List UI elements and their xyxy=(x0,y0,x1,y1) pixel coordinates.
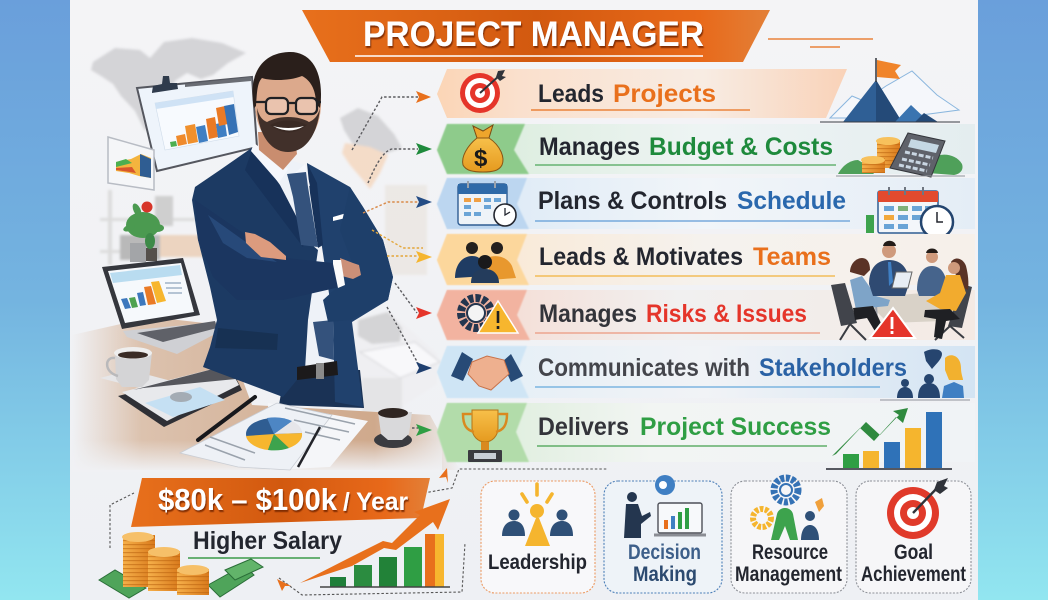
icon: gears and people xyxy=(753,478,824,540)
coffee cup left xyxy=(100,347,175,390)
card: resource management xyxy=(731,478,847,593)
arrow to leads projects xyxy=(352,91,431,150)
right office background xyxy=(350,185,440,412)
label: Delivers xyxy=(538,413,629,441)
world map backdrop xyxy=(91,38,402,189)
icon: coins and cash xyxy=(99,532,263,598)
salary text: $80k – $100k xyxy=(158,482,338,517)
label: Goal xyxy=(894,541,933,564)
row 2: manages budget and costs xyxy=(437,124,975,177)
arrow to risks xyxy=(395,283,432,319)
row 3: plans and controls schedule xyxy=(437,178,975,238)
man right xyxy=(926,251,938,263)
pocket square xyxy=(333,212,350,221)
viewer-left arm with forearm xyxy=(195,200,340,300)
title banner xyxy=(302,10,770,62)
icon: mountain with flag xyxy=(820,58,960,122)
shirt collar xyxy=(251,143,310,186)
arrow to stakeholders xyxy=(387,307,432,374)
jacket left panel xyxy=(192,147,318,397)
connector arrows xyxy=(352,91,432,436)
man center xyxy=(882,244,896,258)
label: Projects xyxy=(613,80,716,108)
viewer-right arm xyxy=(323,187,393,322)
icon: team meeting xyxy=(831,241,972,340)
plant xyxy=(122,202,164,262)
label xyxy=(628,541,701,586)
row 1: leads projects xyxy=(437,58,960,122)
head xyxy=(255,58,321,150)
icon: handshake xyxy=(451,352,523,390)
label: Risks & Issues xyxy=(646,300,807,328)
row 4: leads and motivates teams xyxy=(437,234,975,285)
card: leadership xyxy=(481,481,595,593)
icon: stakeholders xyxy=(897,349,964,398)
icon: money bag: $ xyxy=(474,145,488,172)
label xyxy=(861,541,966,586)
row 5: manages risks and issues xyxy=(437,290,975,340)
icon: gear and warning xyxy=(461,298,518,333)
tie xyxy=(287,172,334,360)
icon: target xyxy=(460,70,506,113)
beard xyxy=(257,108,320,152)
title accent lines xyxy=(768,39,873,47)
small board with area chart xyxy=(108,137,154,190)
salary growth chart xyxy=(300,499,450,587)
label: Plans & Controls xyxy=(538,187,727,215)
card: goal achievement xyxy=(856,478,971,593)
arrow to teams xyxy=(372,230,432,263)
label: Manages xyxy=(539,133,640,161)
label: Project Success xyxy=(640,413,831,441)
belt xyxy=(297,361,338,380)
label: Stakeholders xyxy=(759,354,907,382)
left chair xyxy=(831,283,857,326)
icon: three people xyxy=(455,242,516,283)
icon: trophy xyxy=(463,410,507,462)
notebook xyxy=(118,365,242,427)
jacket right panel xyxy=(307,163,393,407)
icon: leader with team xyxy=(502,484,573,546)
row 7: delivers project success xyxy=(437,403,975,469)
label: Management xyxy=(735,563,842,586)
glasses xyxy=(256,98,321,114)
icon: calendar and stopwatch xyxy=(866,187,953,238)
label: Teams xyxy=(753,243,831,271)
desk xyxy=(72,317,460,472)
salary text: / Year xyxy=(343,488,408,516)
chart board xyxy=(137,76,257,171)
label: Schedule xyxy=(737,187,846,215)
hair xyxy=(252,52,321,108)
pen xyxy=(198,397,255,440)
coffee cup right xyxy=(374,408,412,448)
arrow to schedule xyxy=(363,196,432,213)
laptop xyxy=(102,258,217,354)
right chair xyxy=(948,284,972,328)
woman right xyxy=(951,259,968,290)
label: Budget & Costs xyxy=(649,133,833,161)
arrow to budget xyxy=(368,143,432,183)
illustration: office scene with project manager xyxy=(72,38,460,472)
row 6: communicates with stakeholders xyxy=(437,346,975,400)
icon: presenter with chart xyxy=(624,475,706,538)
label: Communicates with xyxy=(538,354,750,382)
project manager figure xyxy=(192,52,393,408)
label: Decision xyxy=(628,541,701,564)
label: Leads & Motivates xyxy=(539,243,743,271)
shirt xyxy=(253,147,341,366)
icon: calendar with clock xyxy=(458,181,516,226)
pocket flap xyxy=(215,328,278,350)
label: Achievement xyxy=(861,563,966,586)
moustache and smile xyxy=(270,120,307,132)
icon: calculator and coins xyxy=(836,133,965,177)
label: Leadership xyxy=(488,551,587,574)
lapels xyxy=(245,147,323,248)
arrow to success xyxy=(412,424,432,436)
neck xyxy=(258,132,297,170)
icon: target with arrow xyxy=(887,478,948,539)
laptop xyxy=(892,272,912,288)
trousers xyxy=(279,370,364,408)
forearm highlight xyxy=(208,215,277,262)
title text: PROJECT MANAGER xyxy=(363,15,704,54)
label xyxy=(735,541,842,586)
card: decision making xyxy=(604,475,722,593)
label: Leads xyxy=(538,80,604,108)
salary banner xyxy=(131,478,430,527)
woman left xyxy=(850,258,870,276)
soft shelves xyxy=(100,190,215,265)
label: Making xyxy=(633,563,697,586)
label: Manages xyxy=(539,300,637,328)
hands and cuff xyxy=(245,232,286,260)
label: Resource xyxy=(752,541,828,564)
icon: growth bars and arrow xyxy=(826,408,952,469)
report papers with pie chart xyxy=(180,403,368,470)
higher salary label: Higher Salary xyxy=(193,527,342,555)
icon: money bag xyxy=(463,125,503,172)
warning sign xyxy=(870,308,915,338)
salary dotted connectors xyxy=(110,468,607,595)
